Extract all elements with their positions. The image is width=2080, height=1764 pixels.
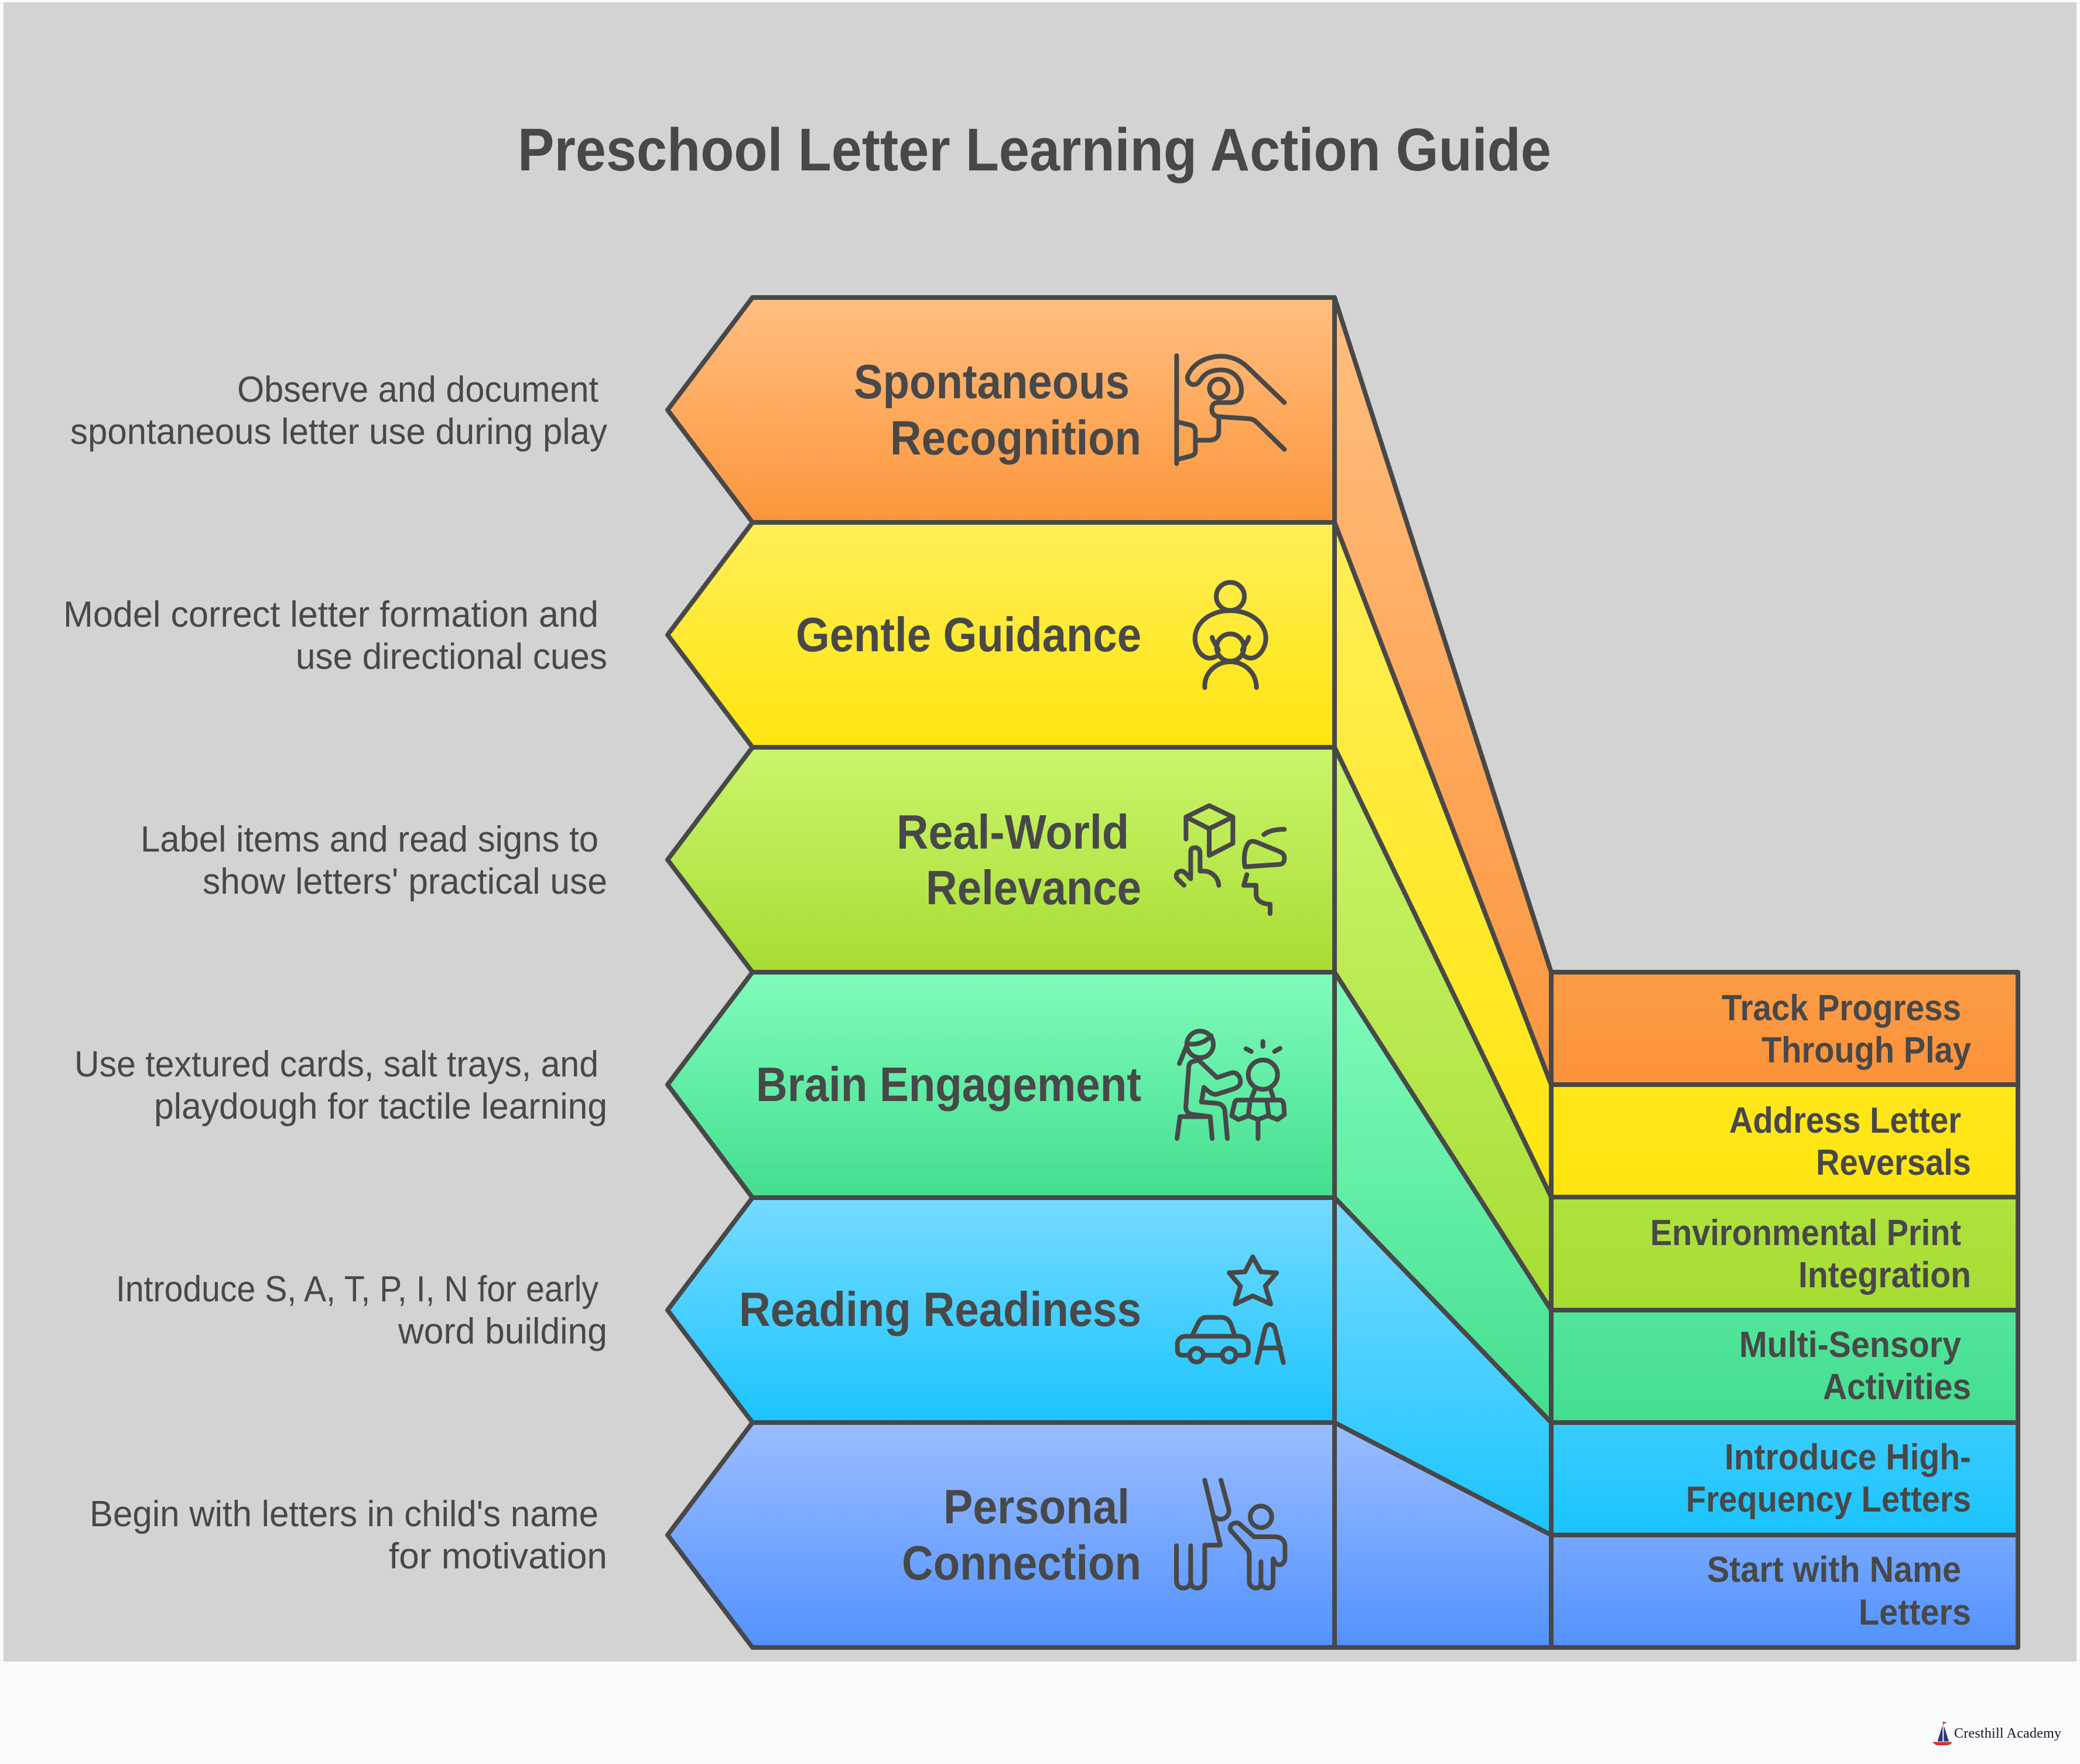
action box: Address Letter Reversals: Address Letter <box>1729 1100 1961 1141</box>
action box: Address Letter Reversals <box>1551 1085 2018 1197</box>
heading: Real-World Relevance: Real-World <box>897 805 1129 859</box>
ribbon: orange connector <box>1335 298 1551 1085</box>
description: Reading Readiness: Introduce S, A, T, P, I, N for early <box>116 1269 598 1310</box>
description: Real-World Relevance: Label items and read signs to <box>141 819 598 860</box>
heading: Real-World Relevance <box>897 805 1141 915</box>
panel: Gentle Guidance <box>668 522 1335 747</box>
icon: pointing at box and sign <box>1176 806 1284 914</box>
action box: Track Progress Through Play: Track Progress <box>1722 988 1961 1028</box>
action box: Start with Name Letters <box>1551 1535 2018 1647</box>
arrow shape: blue <box>668 1198 1335 1423</box>
action box: Introduce High-Frequency Letters: Frequency Letters <box>1686 1479 1971 1520</box>
heading: Gentle Guidance: Gentle Guidance <box>796 607 1141 662</box>
title: Preschool Letter Learning Action Guide <box>518 116 1551 183</box>
heading: Reading Readiness: Reading Readiness <box>739 1282 1141 1336</box>
heading: Spontaneous Recognition <box>854 354 1141 465</box>
description: Reading Readiness <box>116 1269 607 1352</box>
panel: Personal Connection <box>668 1423 1335 1647</box>
action box: Multi-Sensory Activities: Activities <box>1823 1367 1971 1407</box>
arrow shape: green <box>668 747 1335 972</box>
icon: hand holding object <box>1176 355 1284 464</box>
action box: Start with Name Letters: Start with Name <box>1707 1550 1961 1590</box>
description: Spontaneous Recognition <box>70 370 607 452</box>
heading: Spontaneous Recognition: Spontaneous <box>854 354 1130 409</box>
action box: Track Progress Through Play <box>1551 972 2018 1085</box>
icon: adult and child waving <box>1176 1480 1285 1588</box>
icon: adult embracing child <box>1195 582 1266 688</box>
heading: Personal Connection: Personal <box>943 1479 1130 1534</box>
description: Spontaneous Recognition: Observe and document <box>237 370 598 410</box>
description: Personal Connection <box>90 1494 607 1577</box>
heading: Personal Connection <box>902 1479 1141 1590</box>
action box: Multi-Sensory Activities <box>1551 1310 2018 1423</box>
panel: Brain Engagement <box>668 972 1335 1198</box>
description: Spontaneous Recognition: spontaneous letter use during play <box>70 412 607 452</box>
arrow shape: orange <box>668 298 1335 522</box>
action box: Multi-Sensory Activities: Multi-Sensory <box>1739 1325 1961 1365</box>
logo: Cresthill Academy <box>1932 1721 2061 1745</box>
description: Reading Readiness: word building <box>398 1311 607 1352</box>
description: Gentle Guidance: Model correct letter formation and <box>63 594 598 635</box>
action box: Track Progress Through Play: Through Play <box>1761 1030 1971 1071</box>
action box: Environmental Print Integration: Environmental Print <box>1650 1213 1961 1253</box>
ribbon: blue connector <box>1335 1198 1551 1535</box>
action box: Environmental Print Integration: Integration <box>1798 1255 1971 1295</box>
description: Real-World Relevance: show letters' practical use <box>203 862 607 902</box>
ribbon: mint connector <box>1335 972 1551 1423</box>
panel: Real-World Relevance <box>668 747 1335 972</box>
heading: Personal Connection: Connection <box>902 1536 1141 1590</box>
icon: star, car and letter A <box>1178 1257 1284 1363</box>
description: Personal Connection: Begin with letters in child's name <box>90 1494 598 1534</box>
arrow shape: periwinkle <box>668 1423 1335 1647</box>
description: Real-World Relevance <box>141 819 607 902</box>
description: Brain Engagement: playdough for tactile learning <box>154 1086 607 1127</box>
ribbon: periwinkle connector <box>1335 1423 1551 1647</box>
action box: Address Letter Reversals: Reversals <box>1816 1143 1971 1183</box>
description: Brain Engagement: Use textured cards, salt trays, and <box>74 1044 598 1085</box>
description: Brain Engagement <box>74 1044 607 1127</box>
heading: Brain Engagement: Brain Engagement <box>756 1057 1141 1112</box>
arrow shape: yellow <box>668 522 1335 747</box>
ribbon: green connector <box>1335 747 1551 1310</box>
arrow shape: mint <box>668 972 1335 1198</box>
action box: Environmental Print Integration <box>1551 1197 2018 1310</box>
logo: Cresthill Academy: Cresthill Academy <box>1954 1726 2061 1741</box>
description: Personal Connection: for motivation <box>389 1536 607 1577</box>
icon: sailboat <box>1932 1721 1952 1745</box>
action box: Start with Name Letters: Letters <box>1859 1592 1971 1633</box>
heading: Spontaneous Recognition: Recognition <box>890 411 1141 465</box>
ribbon: yellow connector <box>1335 522 1551 1197</box>
description: Gentle Guidance <box>63 594 607 677</box>
action box: Introduce High-Frequency Letters: Introduce High- <box>1725 1437 1971 1478</box>
panel: Reading Readiness <box>668 1198 1335 1423</box>
icon: teacher and child <box>1177 1031 1284 1139</box>
panel: Spontaneous Recognition <box>668 298 1335 522</box>
description: Gentle Guidance: use directional cues <box>296 637 607 677</box>
heading: Real-World Relevance: Relevance <box>926 860 1141 915</box>
action box: Introduce High-Frequency Letters <box>1551 1423 2018 1535</box>
